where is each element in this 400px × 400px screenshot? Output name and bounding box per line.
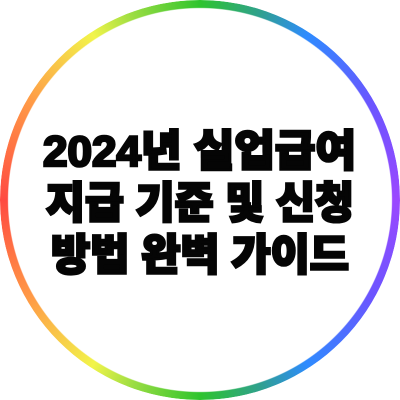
- title line 3: 방법 완벽 가이드: [51, 232, 349, 280]
- title line 1: 2024년 실업급여: [43, 128, 356, 176]
- title line 2: 지급 기준 및 신청: [46, 180, 354, 228]
